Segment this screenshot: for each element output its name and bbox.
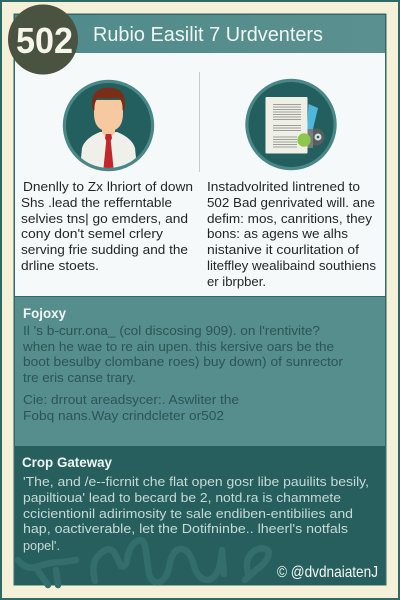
text: Crop Gateway body: hap, oactiverable, let the Dotifninbe.. lheerl's notfals [23, 521, 349, 536]
text: left column: drline stoets. [21, 258, 99, 273]
text: right column [207, 179, 377, 289]
text: right column: liteffley wealibaind southiens [207, 258, 377, 273]
panel: Crop Gateway [15, 446, 385, 585]
text: left column: Dnenlly to Zx lhriort of down [23, 179, 193, 194]
title banner [15, 15, 385, 53]
text: left column: serving frie sudding and the [21, 242, 188, 257]
text: left column: Shs .lead the refferntable [21, 195, 172, 210]
text: Crop Gateway body: ccicientionil adirimosity te sale endiben-entibilies and [23, 506, 353, 521]
icon: person in teal circle [63, 80, 154, 171]
text: left column [21, 179, 193, 273]
text: Fojoxy body: tre eris canse trary. [23, 370, 136, 385]
text: Fojoxy body: Il 's b-curr.ona_ (col discosing 909). on l'rentivite? [23, 323, 320, 338]
text: Fojoxy body: boot besulby clombane roes) buy down) of sunrector [23, 354, 344, 369]
badge: 502 [8, 4, 78, 74]
text: Fojoxy body: Cie: drrout areadsycer:. Aswliter the [23, 392, 239, 407]
panel: Fojoxy [15, 297, 385, 446]
text: left column: selvies tns| go emders, and [21, 211, 188, 226]
text: Fojoxy body: when he wae to re ain upen. this kersive oars be the [22, 339, 334, 354]
credit: © @dvdnaiatenJ [277, 564, 378, 581]
icon: document in teal circle [245, 79, 337, 170]
text: Fojoxy body [22, 323, 344, 423]
text: right column: defim: mos, canritions, they [207, 211, 373, 226]
text: left column: cony don't semel crlery [21, 226, 164, 241]
text: Crop Gateway body: popel'. [23, 538, 60, 553]
heading: Fojoxy: Fojoxy [23, 305, 66, 321]
text: right column: nistanive it courlitation of [207, 242, 359, 257]
badge: 502: 502 [16, 20, 73, 61]
text: right column: bons: as agens we alhs [207, 226, 349, 241]
heading: Crop Gateway: Crop Gateway [22, 454, 112, 470]
title banner: Rubio Easilit 7 Urdventers [93, 24, 323, 46]
text: right column: Instadvolrited lintrened to [207, 179, 360, 194]
text: Crop Gateway body [23, 474, 369, 553]
text: Crop Gateway body: papiltioua' lead to becard be 2, notd.ra is chammete [23, 490, 341, 505]
panel: intro comparison [15, 53, 385, 296]
text: right column: er ibrpber. [207, 274, 266, 289]
text: Fojoxy body: Fobq nans.Way crindcleter or502 [23, 408, 224, 423]
text: Crop Gateway body: 'The, and /e--ficrnit che flat open gosr libe pauilits besily, [23, 474, 369, 489]
text: right column: 502 Bad genrivated will. ane [207, 195, 375, 210]
